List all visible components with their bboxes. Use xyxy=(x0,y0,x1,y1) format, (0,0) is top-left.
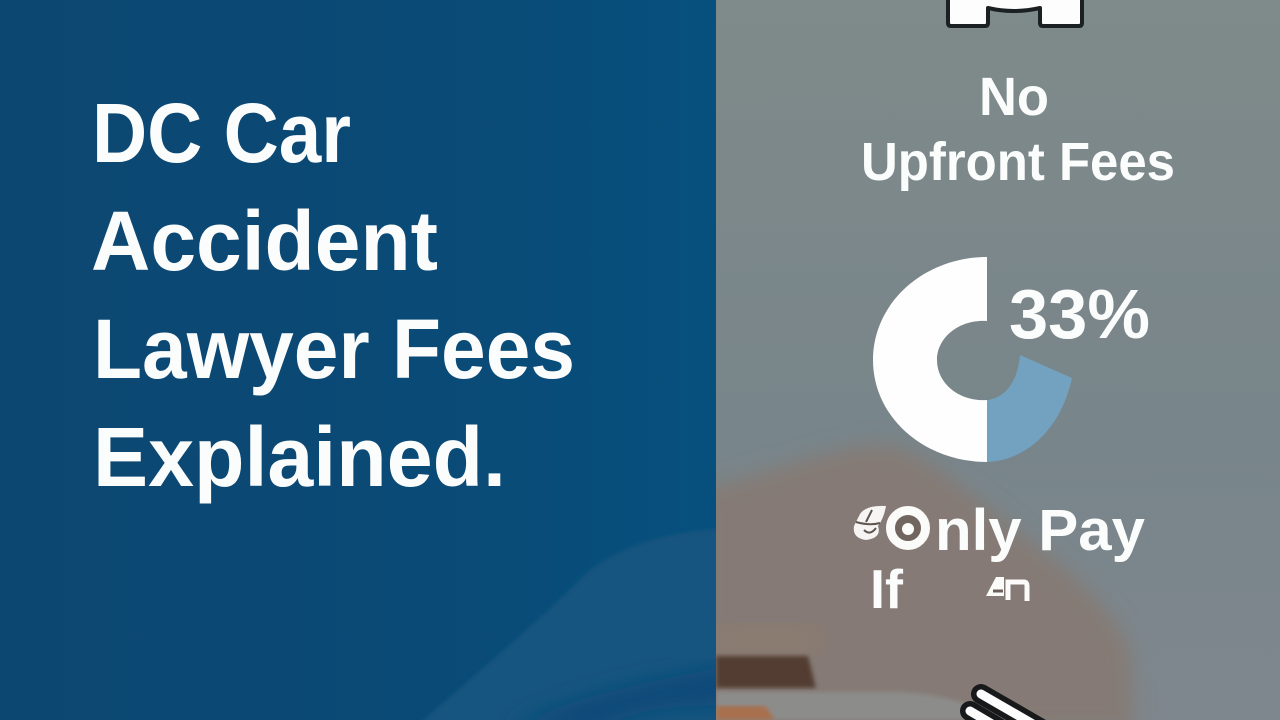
donut segment: blue xyxy=(987,355,1072,462)
icon: garbled glyph xyxy=(854,506,886,540)
text: only pay if won: nly Pay xyxy=(935,498,1145,563)
panel: left blue background xyxy=(426,528,716,720)
text: only pay if won: If xyxy=(870,558,904,620)
heading: no upfront fees: Upfront Fees xyxy=(861,132,1175,192)
title: Accident xyxy=(91,194,438,288)
title xyxy=(91,86,575,504)
garbled word xyxy=(986,577,1027,601)
label: 33 percent: 33% xyxy=(1009,275,1150,353)
title: Lawyer Fees xyxy=(93,302,575,396)
heading: no upfront fees xyxy=(861,67,1175,192)
title: Explained. xyxy=(93,410,506,504)
icon: top building fragment xyxy=(948,0,1082,26)
title: DC Car xyxy=(92,86,351,180)
panel: right photo background xyxy=(700,0,1280,720)
text: only pay if won xyxy=(854,498,1145,620)
heading: no upfront fees: No xyxy=(979,67,1049,127)
donut chart: 33 percent xyxy=(873,257,1072,462)
icon: ring letter O xyxy=(890,510,926,546)
donut segment: white xyxy=(873,257,987,462)
icon: bottom pen bars xyxy=(970,694,1045,720)
